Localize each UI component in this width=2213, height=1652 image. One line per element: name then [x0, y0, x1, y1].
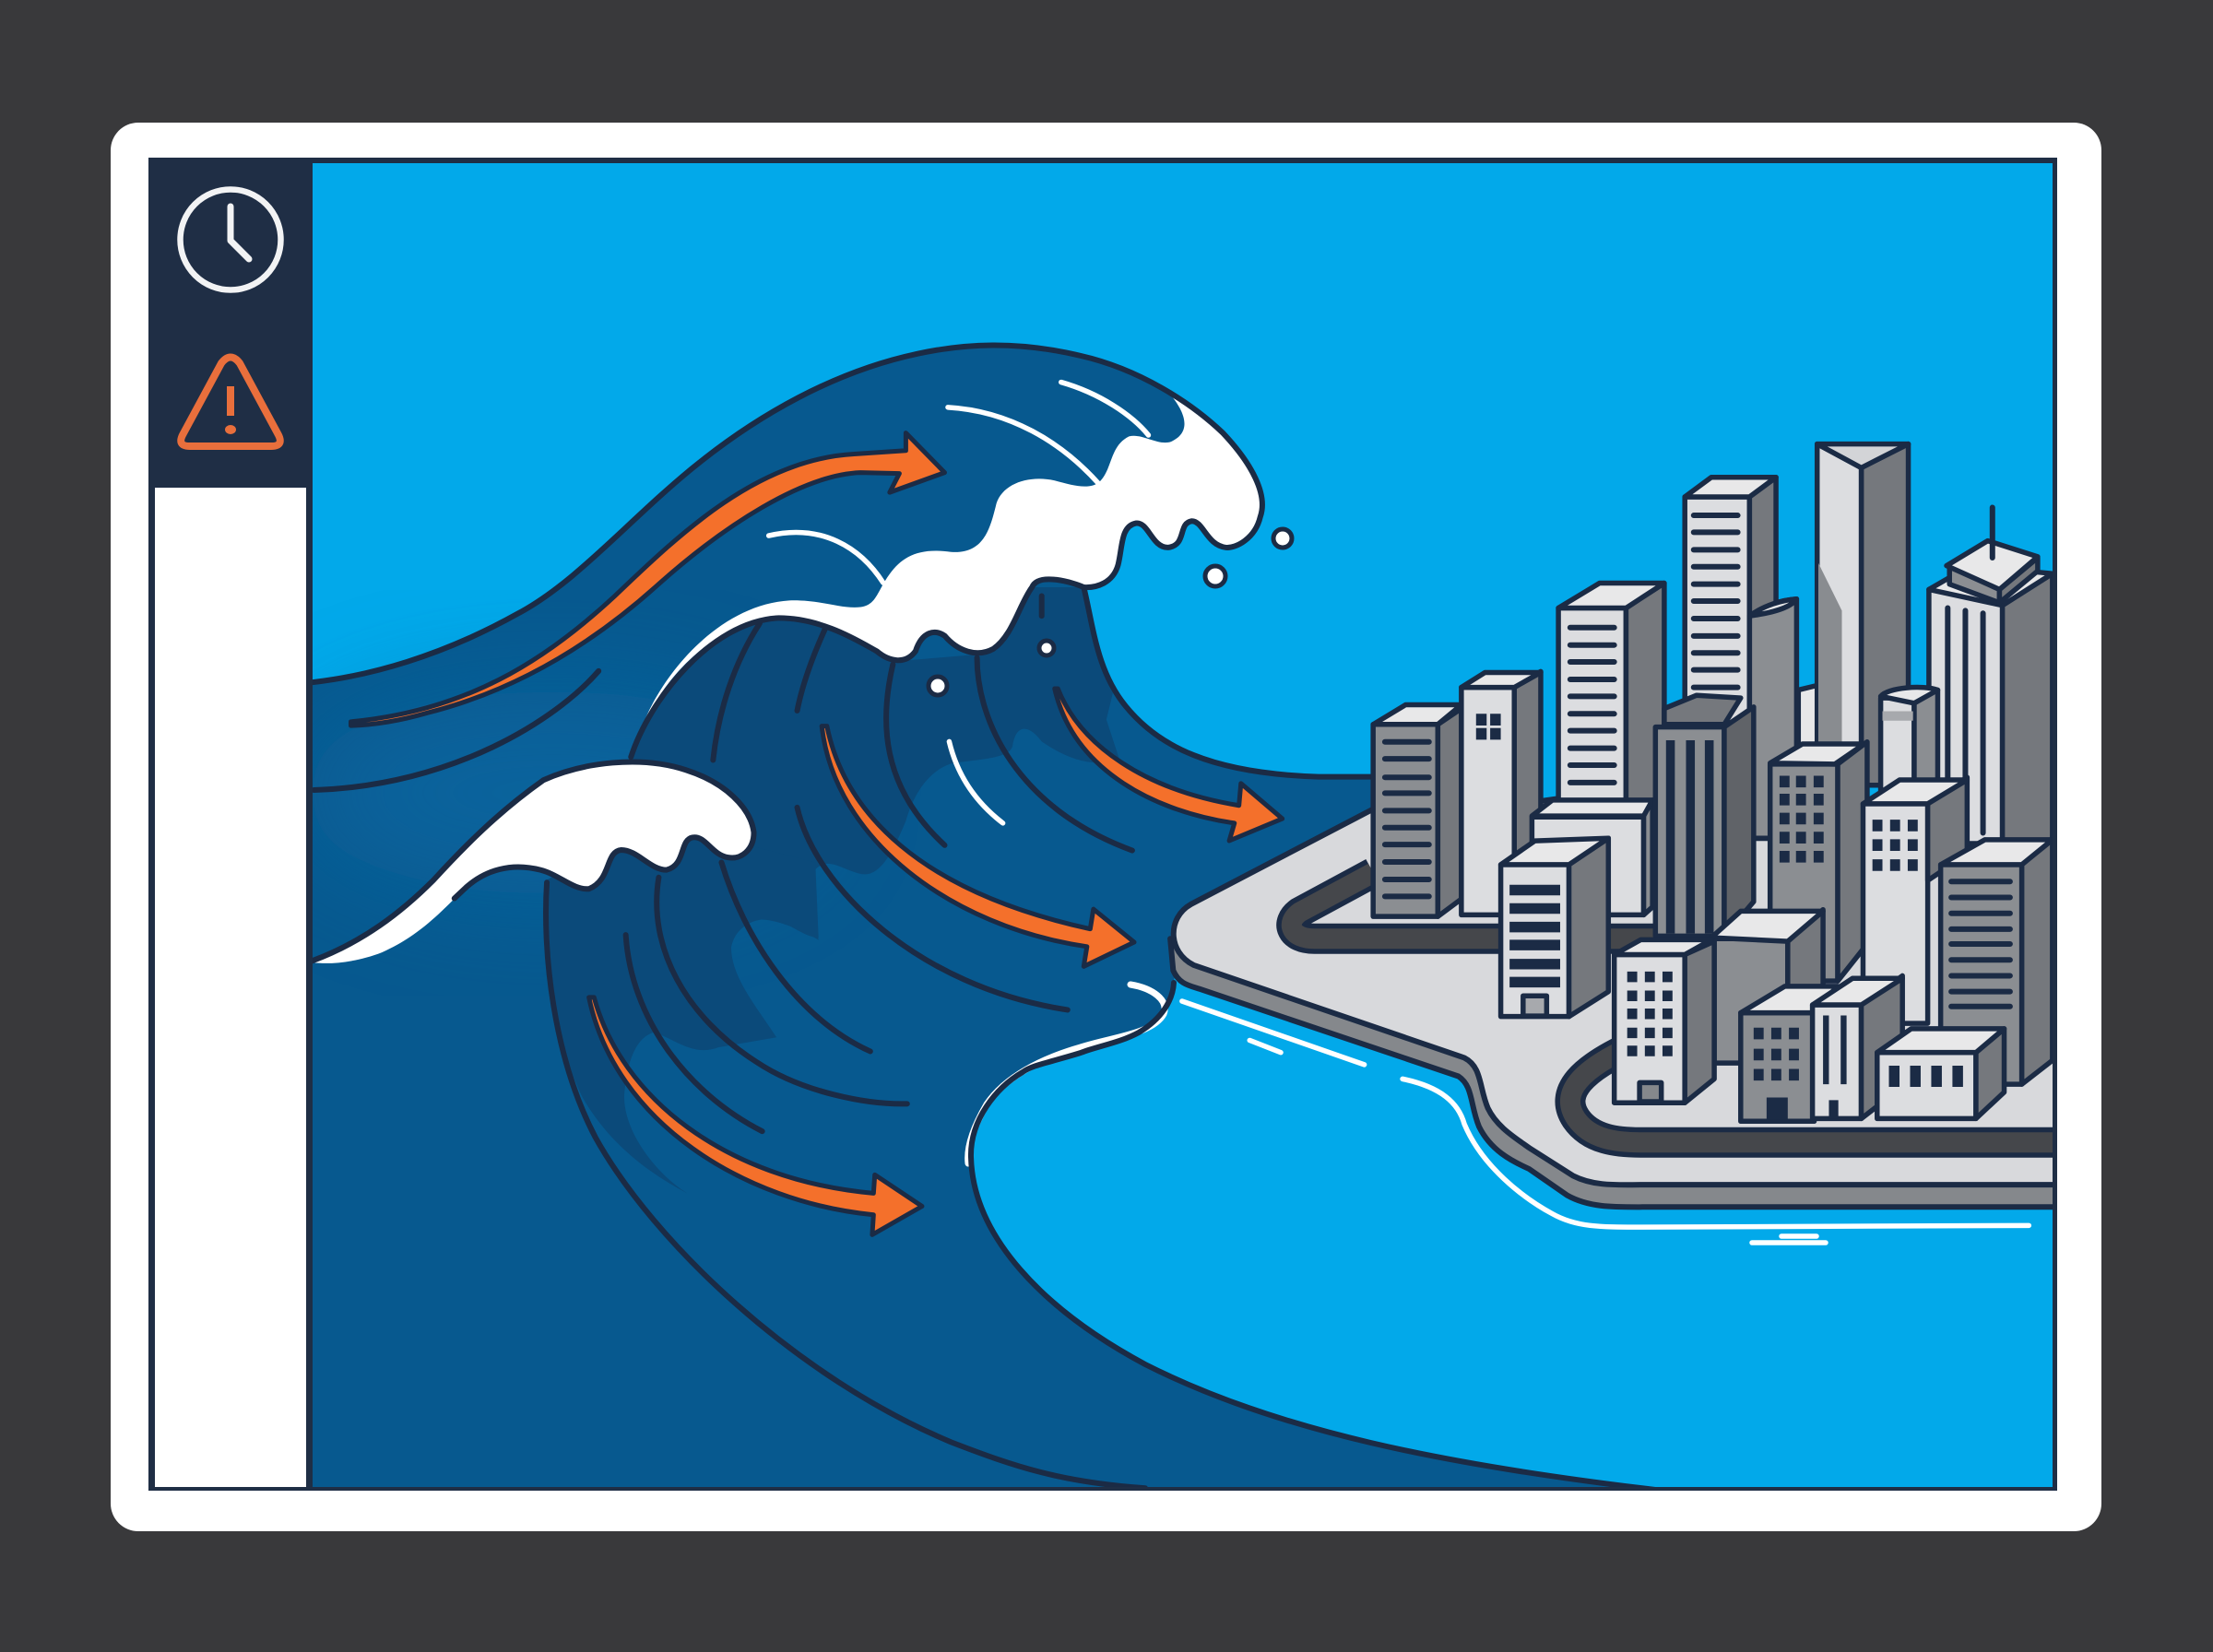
- building: curved tower: [1749, 599, 1796, 838]
- hollow shading upper: [631, 587, 1119, 966]
- road lower: [1570, 1044, 2058, 1142]
- building: small cylinder: [1881, 688, 1937, 791]
- icon: warning triangle: [181, 358, 280, 446]
- building: low grey block: [1711, 910, 1823, 1063]
- wave lighter mid tone: [352, 713, 644, 873]
- secondary foam crest: [311, 762, 754, 963]
- road upper: [1292, 873, 1659, 938]
- current lines lower: [546, 808, 1145, 1488]
- backdrop block: [1799, 683, 1815, 743]
- panel: white card: [111, 123, 2101, 1531]
- sky background: [313, 163, 2053, 1487]
- wave body lower: [304, 968, 1687, 1493]
- building: narrow front tower: [1813, 975, 1902, 1118]
- icon: clock: [181, 190, 280, 289]
- building: white block: [1863, 777, 1967, 1023]
- building: tall back tower: [1682, 475, 1779, 721]
- white water streaks: [769, 383, 1148, 823]
- coastal city: [1170, 444, 2058, 1227]
- land side band: [1170, 938, 2058, 1207]
- main foam crest: [641, 395, 1262, 730]
- building: striped tower: [1558, 584, 1664, 801]
- shoreline edge: [971, 983, 1687, 1493]
- foam bubbles: [929, 529, 1292, 695]
- building: front windowed block: [1615, 939, 1714, 1103]
- building: left grey tower: [1373, 705, 1462, 916]
- building: low front block: [1877, 1029, 2005, 1118]
- offshore ripple lines: [1752, 1236, 1826, 1243]
- shoreline curl foam: [968, 985, 1165, 1163]
- arrows upper: [351, 433, 1283, 966]
- wave body upper: [313, 348, 1370, 968]
- panel: scene: [291, 163, 2058, 1493]
- building: low wide block: [1532, 800, 1652, 914]
- panel: dark inner frame: [148, 158, 2057, 1491]
- building: dark central tower: [1655, 695, 1754, 936]
- sidebar: dark panel: [148, 158, 313, 1491]
- building: spire tower: [1817, 444, 1909, 785]
- current lines upper: [314, 596, 1132, 851]
- building: right grey tower: [1941, 838, 2053, 1084]
- wave outlines: [291, 345, 1469, 777]
- illustration: tsunami card: [111, 123, 2101, 1531]
- sidebar: white blank box: [155, 488, 306, 1487]
- building: grid tower: [1770, 742, 1867, 981]
- building: slim light tower: [1462, 671, 1541, 914]
- hollow shading lower: [546, 837, 819, 1193]
- land surface: [1174, 785, 2058, 1185]
- building: right crown tower: [1929, 507, 2053, 844]
- shoreline wake lines: [1182, 1001, 2029, 1227]
- arrow lower: [589, 997, 922, 1234]
- building: front dark block: [1741, 986, 1838, 1121]
- building: front bar tower: [1501, 838, 1608, 1017]
